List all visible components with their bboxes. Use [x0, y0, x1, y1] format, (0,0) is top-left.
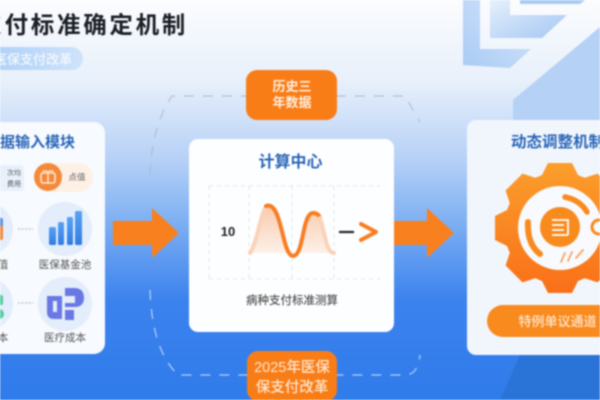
panel: calculation center — [189, 139, 394, 332]
top tag: three-year data: 历史三 — [272, 79, 312, 94]
connector dots lower — [18, 302, 33, 304]
button: special case channel — [487, 305, 600, 337]
arrow: calculation to adjustment — [394, 208, 454, 258]
heading: 计算中心 — [258, 152, 323, 171]
button: special case channel: 特例单议通道 — [518, 314, 597, 329]
wave chart — [250, 205, 334, 256]
panel: data input module — [0, 122, 105, 354]
connector dots upper — [18, 228, 33, 230]
chip: point value — [34, 163, 93, 192]
chip: per-visit cost: 次均 — [7, 168, 21, 177]
chip: point value: 点值 — [68, 172, 86, 182]
panel: dynamic adjustment — [467, 120, 600, 355]
icon: medical cost — [38, 277, 92, 331]
arrow: input to calculation — [113, 208, 179, 258]
label: medical cost: 医疗成本 — [44, 331, 86, 344]
icon: gear — [495, 163, 600, 293]
chip: per-visit cost: 费用 — [7, 179, 21, 188]
bottom tag: 2025 reform: 2025年医保 — [254, 359, 330, 376]
dashed process ring bottom — [150, 290, 420, 375]
chip: per-visit cost — [0, 165, 24, 191]
icon: green cost circle — [0, 277, 13, 331]
top tag: three-year data: 年数据 — [272, 95, 312, 110]
value 10: 10 — [221, 224, 235, 239]
chart grid — [209, 186, 380, 279]
subtitle pill — [0, 47, 83, 70]
chart caption: 病种支付标准测算 — [246, 293, 338, 307]
decorative corner shapes — [463, 0, 600, 400]
bottom tag: 2025 reform: 保支付改革 — [256, 379, 328, 396]
top tag: three-year data — [246, 70, 337, 120]
bottom tag: 2025 reform — [247, 351, 337, 400]
icon: partial value circle — [0, 202, 13, 256]
arrow chevron — [361, 224, 376, 240]
dash mark — [339, 231, 354, 233]
dashed process ring top — [150, 96, 420, 175]
label: fund pool: 医保基金池 — [39, 258, 92, 271]
icon: fund pool bars — [38, 202, 92, 256]
